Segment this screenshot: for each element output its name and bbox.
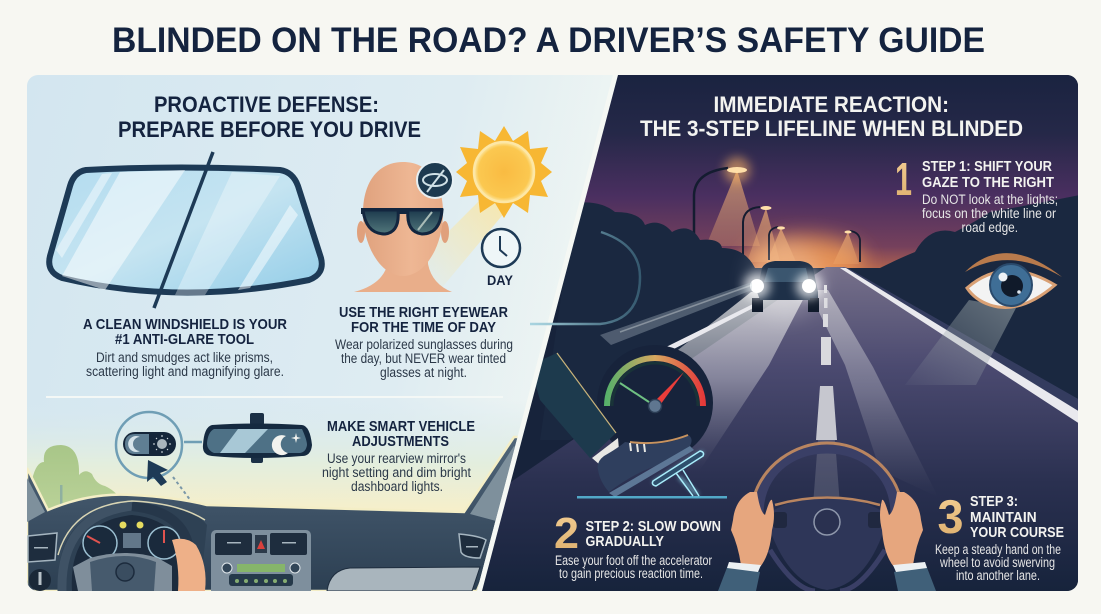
icon: oncoming car <box>744 242 823 318</box>
step 2: Ease your foot off the accelerator <box>555 553 712 568</box>
icon: dashboard <box>27 437 540 600</box>
step 3: Keep a steady hand on the <box>935 542 1061 557</box>
step 2: STEP 2: SLOW DOWN <box>586 518 721 535</box>
text: vehicle adjustments <box>322 418 475 494</box>
panel heading: immediate reaction: THE 3-STEP LIFELINE WHEN BLINDED <box>640 116 1023 141</box>
step number 2: 2 <box>554 509 579 558</box>
step 1: STEP 1: SHIFT YOUR <box>922 158 1052 175</box>
step 2: GRADUALLY <box>586 533 664 550</box>
icon: street lamps <box>692 151 861 264</box>
icon: road <box>470 267 1080 600</box>
icon: leg and shoe on pedal <box>530 353 727 498</box>
label: day: DAY <box>487 272 514 288</box>
text: clean windshield <box>83 316 287 379</box>
step 3: MAINTAIN <box>970 509 1037 526</box>
step 3: into another lane. <box>956 568 1040 583</box>
icon: eye <box>905 253 1062 385</box>
sub-element: instrument cluster <box>58 503 207 591</box>
icon: steering wheel and hands <box>718 443 936 591</box>
text: vehicle adjustments: dashboard lights. <box>351 479 443 494</box>
text: clean windshield: Dirt and smudges act like prisms, <box>96 350 273 365</box>
icon: cursor arrow <box>147 460 191 501</box>
text: right eyewear <box>335 304 513 380</box>
icon: rearview mirror <box>203 413 312 463</box>
step 2: to gain precious reaction time. <box>559 566 703 581</box>
icon: trees <box>32 445 116 508</box>
icon: mirror switch magnifier <box>116 412 202 478</box>
divider between panels <box>477 75 618 591</box>
text: right eyewear: Wear polarized sunglasses during <box>335 337 513 352</box>
step 3: wheel to avoid swerving <box>939 555 1055 570</box>
title: BLINDED ON THE ROAD? A DRIVER’S SAFETY GUIDE <box>112 21 985 60</box>
sub-element: air vents and knob <box>28 533 486 591</box>
text: vehicle adjustments: Use your rearview mirror's <box>327 451 466 466</box>
text: right eyewear: the day, but NEVER wear tinted <box>341 351 506 366</box>
icon: polarized badge <box>417 162 453 198</box>
step 1: focus on the white line or <box>922 206 1056 221</box>
icon: speedometer <box>604 346 713 448</box>
icon: bald head with sunglasses <box>354 162 452 292</box>
step number 1: 1 <box>895 153 912 205</box>
sub-element: glove compartment <box>327 567 480 591</box>
icon: tree silhouette <box>566 196 1078 300</box>
step 1: Do NOT look at the lights; <box>922 192 1058 207</box>
panel heading: proactive defense: PREPARE BEFORE YOU DRIVE <box>118 117 421 142</box>
text: clean windshield: A CLEAN WINDSHIELD IS YOUR <box>83 316 287 333</box>
panel heading: proactive defense: PROACTIVE DEFENSE: <box>154 92 379 117</box>
icon: sun with light beam <box>418 126 552 290</box>
panel heading: immediate reaction: IMMEDIATE REACTION: <box>714 92 949 117</box>
panel heading: immediate reaction <box>640 96 1022 136</box>
text: right eyewear: USE THE RIGHT EYEWEAR <box>339 304 508 321</box>
text: clean windshield: #1 ANTI-GLARE TOOL <box>115 331 254 348</box>
step 1: road edge. <box>962 220 1018 235</box>
panel heading: proactive defense <box>119 96 420 137</box>
text: vehicle adjustments: night setting and dim bright <box>322 465 471 480</box>
step 1: GAZE TO THE RIGHT <box>922 174 1054 191</box>
step 3: YOUR COURSE <box>970 524 1064 541</box>
text: right eyewear: glasses at night. <box>380 365 467 380</box>
sub-element: center console <box>211 530 311 591</box>
step 3 <box>936 496 1064 580</box>
icon: windshield <box>49 152 322 308</box>
sub-element: steering wheel <box>58 501 206 591</box>
icon: side light streaks <box>600 282 752 345</box>
step 2 <box>556 518 720 581</box>
arrow: curved transition line <box>530 232 640 324</box>
text: vehicle adjustments: ADJUSTMENTS <box>352 433 449 450</box>
text: vehicle adjustments: MAKE SMART VEHICLE <box>327 418 475 435</box>
icon: clock <box>482 229 520 267</box>
step 1 <box>896 161 1057 235</box>
text: clean windshield: scattering light and magnifying glare. <box>86 364 284 379</box>
panel: immediate reaction <box>470 75 1080 600</box>
step 3: STEP 3: <box>970 493 1018 510</box>
text: right eyewear: FOR THE TIME OF DAY <box>351 319 496 336</box>
step number 3: 3 <box>938 490 964 543</box>
